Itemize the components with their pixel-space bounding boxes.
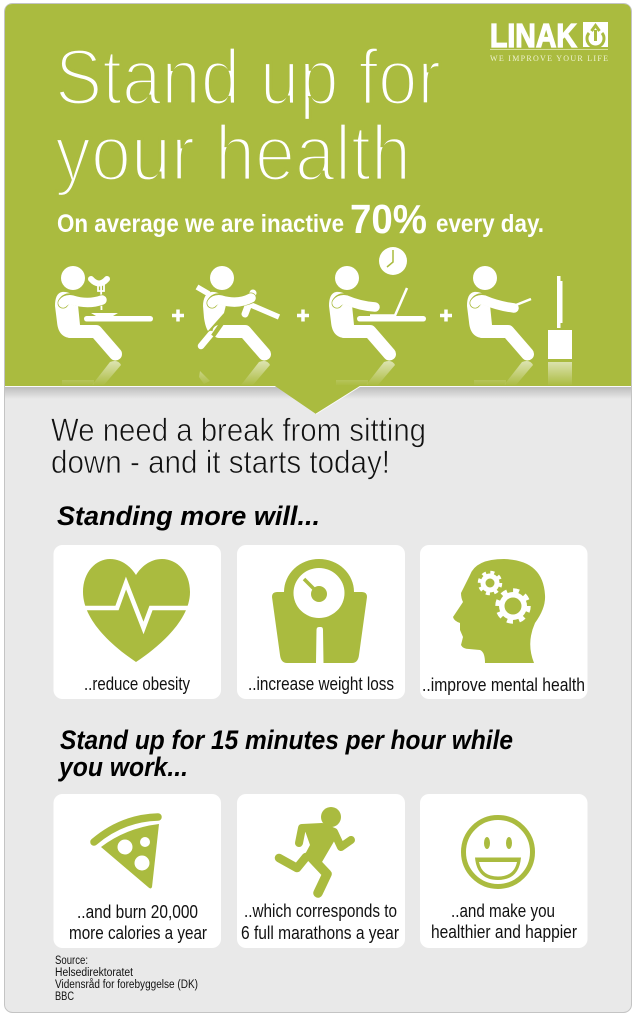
figure: sitting watching TV [467,266,533,385]
logo: LINAK: LINAK [490,17,577,54]
heading: break from sitting: down - and it starts today! [51,444,390,480]
heading: stand up for 15 minutes: Stand up for 15 minutes per hour while [60,725,513,755]
green header panel [5,4,631,414]
card: healthier and happier: healthier and happier [431,921,577,942]
icon: heart [83,559,190,662]
sources: Source: [55,955,88,967]
figure: sitting at laptop [329,266,426,385]
icon: television [548,276,572,385]
icon: smiley [464,818,532,886]
figure: sitting eating [55,266,153,385]
card: marathons [237,794,405,948]
card: improve mental health [420,545,588,699]
sources: Helsedirektoratet [55,967,134,979]
card: burn calories: ..and burn 20,000 [77,901,198,922]
icon: pizza slice [94,817,159,888]
sources: Vidensråd for forebyggelse (DK) [55,979,198,991]
sources [55,955,198,1003]
card: burn calories [54,794,221,948]
card: increase weight loss: ..increase weight loss [248,673,394,694]
icon: clock [379,247,407,275]
icon: head with gears [453,559,545,663]
logo: LINAK [490,17,608,63]
sources: BBC [55,991,74,1003]
card: healthier and happier [420,794,588,948]
card: healthier and happier: ..and make you [451,900,555,921]
heading: stand up for 15 minutes [57,725,513,782]
card: increase weight loss [237,545,405,699]
header edge highlight [5,386,631,414]
heading: standing more will: Standing more will... [57,501,320,531]
subtitle [57,196,544,242]
heading: break from sitting: We need a break from sitting [51,412,426,448]
card: reduce obesity [54,545,221,699]
title: your health [55,108,411,197]
heading: stand up for 15 minutes: you work... [57,752,188,782]
plus sign [172,310,184,322]
figure: sitting in car [197,266,279,385]
plus sign [297,310,309,322]
title: Stand up for [55,32,441,121]
plus sign [440,310,452,322]
card: improve mental health: ..improve mental health [422,674,585,695]
card: marathons: ..which corresponds to [244,900,397,921]
icon: runner [279,807,351,893]
card: marathons: 6 full marathons a year [241,922,399,943]
card: burn calories: more calories a year [69,922,207,943]
subtitle: On average we are inactive [57,210,344,238]
logo: LINAK: WE IMPROVE YOUR LIFE [490,54,608,63]
subtitle: every day. [436,210,544,238]
icon: scale [272,559,367,663]
card: reduce obesity: ..reduce obesity [84,673,191,694]
heading: break from sitting [51,412,426,480]
shadow under green header [5,387,631,399]
subtitle: 70% [350,196,427,242]
title [55,32,441,197]
